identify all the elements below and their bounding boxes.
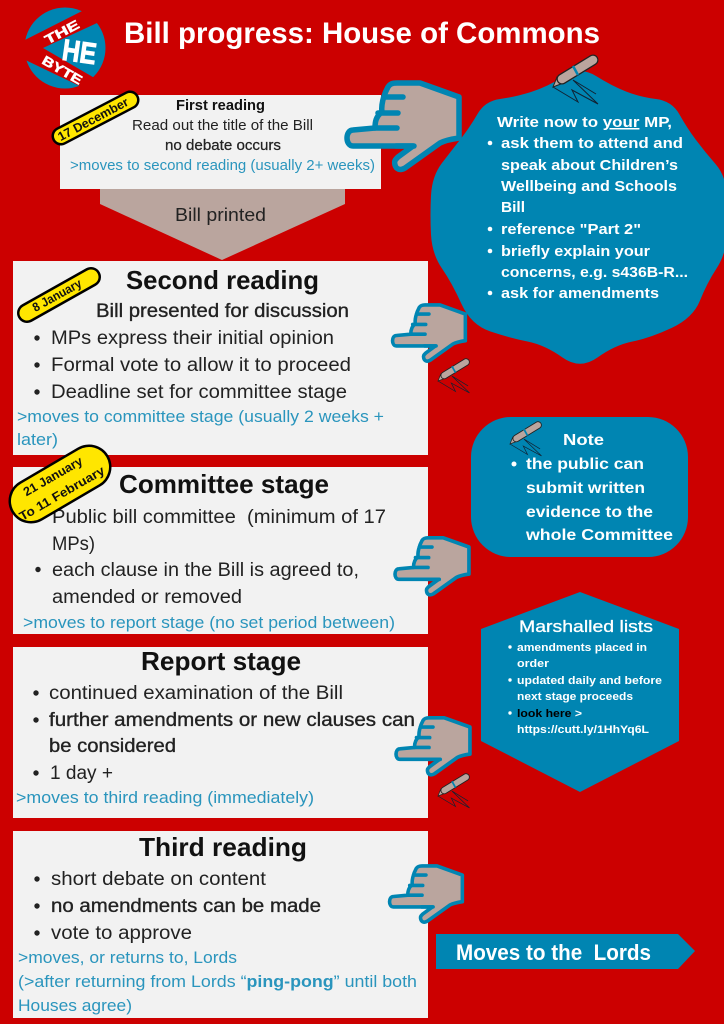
panel: second reading: Deadline set for committee stage bbox=[51, 382, 347, 403]
callout: write to your MP: reference "Part 2" bbox=[501, 221, 641, 238]
icon: pen beside second reading bbox=[438, 362, 470, 393]
panel: committee stage: Committee stage bbox=[119, 469, 329, 499]
logo: The HE Byte: BYTE bbox=[39, 53, 85, 88]
callout: note: Note bbox=[563, 432, 604, 449]
panel: third reading: Houses agree) bbox=[18, 996, 132, 1015]
icon: hand pointing at second reading bbox=[393, 305, 465, 361]
panel: committee stage: amended or removed bbox=[52, 587, 242, 608]
callout: marshalled lists: next stage proceeds bbox=[517, 691, 633, 703]
callout: marshalled lists: order bbox=[517, 658, 550, 670]
date badge: 17 December: 17 December bbox=[55, 95, 131, 144]
callout: write to your MP: ask them to attend and bbox=[501, 135, 683, 152]
icon: hand pointing at first reading bbox=[347, 83, 459, 169]
panel: report stage: be considered bbox=[49, 736, 176, 757]
panel: first reading: First reading bbox=[176, 98, 265, 114]
panel: second reading: Second reading bbox=[126, 265, 319, 295]
date badge: 21 January to 11 February: 21 January bbox=[21, 454, 85, 499]
icon: pen on MP callout bbox=[553, 60, 598, 104]
callout: marshalled lists: Marshalled lists bbox=[519, 617, 653, 636]
panel: first reading: Read out the title of the Bill bbox=[132, 118, 313, 134]
panel: report stage: Report stage bbox=[141, 646, 301, 676]
icon: hand pointing at third reading bbox=[390, 866, 462, 922]
icon: hand pointing at committee stage bbox=[395, 538, 469, 595]
panel: third reading: Third reading bbox=[139, 832, 307, 862]
panel: second reading: later) bbox=[17, 430, 58, 449]
panel: committee stage: Public bill committee (minimum of 17 bbox=[52, 507, 386, 528]
panel: second reading: MPs express their initial opinion bbox=[51, 328, 334, 349]
arrow: Bill printed: Bill printed bbox=[175, 205, 266, 225]
panel: committee stage: each clause in the Bill is agreed to, bbox=[52, 560, 359, 581]
callout: write to your MP: speak about Children’s bbox=[501, 157, 678, 174]
panel: committee stage bbox=[13, 467, 428, 634]
arrow: Bill printed bbox=[100, 189, 345, 260]
panel: report stage: further amendments or new clauses can bbox=[49, 710, 415, 731]
panel: first reading bbox=[60, 95, 381, 189]
icon: pen on note bbox=[510, 425, 542, 456]
callout: write to your MP: ask for amendments bbox=[501, 285, 659, 302]
panel: second reading bbox=[13, 261, 428, 455]
callout: write to your MP: Bill bbox=[501, 199, 525, 216]
panel: second reading: >moves to committee stage (usually 2 weeks + bbox=[17, 407, 384, 426]
panel: report stage: >moves to third reading (immediately) bbox=[16, 788, 314, 807]
callout: write to your MP: Write now to your MP, bbox=[497, 114, 672, 131]
panel: third reading: (>after returning from Lords “ ping-pong” until both bbox=[18, 972, 417, 991]
date badge: 8 January: 8 January bbox=[30, 276, 84, 315]
panel: first reading: >moves to second reading (usually 2+ weeks) bbox=[70, 157, 375, 174]
callout: marshalled lists: look here > bbox=[517, 708, 582, 720]
callout: marshalled lists: updated daily and before bbox=[517, 675, 662, 687]
panel: third reading: short debate on content bbox=[51, 869, 267, 890]
icon: pen beside report stage bbox=[438, 777, 470, 808]
panel: committee stage: MPs) bbox=[52, 534, 95, 555]
arrow: moves to the Lords: Moves to the Lords bbox=[456, 940, 651, 965]
callout: note: evidence to the bbox=[526, 504, 653, 521]
callout: note: submit written bbox=[526, 480, 645, 497]
callout: note bbox=[471, 417, 688, 557]
panel: report stage: 1 day + bbox=[50, 763, 113, 784]
panel: third reading: no amendments can be made bbox=[51, 896, 321, 917]
date badge: 21 January to 11 February: To 11 February bbox=[17, 463, 107, 524]
callout: write to your MP: briefly explain your bbox=[501, 243, 650, 260]
panel: report stage bbox=[13, 646, 428, 818]
panel: report stage: continued examination of the Bill bbox=[49, 683, 343, 704]
callout: marshalled lists: amendments placed in bbox=[517, 642, 647, 654]
panel: second reading: Bill presented for discussion bbox=[96, 301, 349, 322]
panel: third reading bbox=[13, 831, 428, 1018]
panel: third reading: >moves, or returns to, Lords bbox=[18, 948, 237, 967]
arrow: moves to the Lords bbox=[436, 934, 695, 969]
panel: committee stage: >moves to report stage (no set period between) bbox=[23, 613, 395, 632]
callout: write to your MP: Wellbeing and Schools bbox=[501, 178, 677, 195]
title: Bill progress: House of Commons bbox=[124, 17, 600, 50]
logo: The HE Byte bbox=[15, 7, 110, 91]
callout: note: whole Committee bbox=[525, 527, 673, 544]
callout: marshalled lists bbox=[481, 592, 679, 792]
callout: marshalled lists: https://cutt.ly/1HhYq6L bbox=[517, 724, 649, 736]
logo: The HE Byte: THE bbox=[42, 16, 82, 47]
callout: write to your MP: concerns, e.g. s436B-R... bbox=[501, 264, 688, 281]
panel: second reading: Formal vote to allow it to proceed bbox=[51, 355, 351, 376]
panel: third reading: vote to approve bbox=[51, 923, 192, 944]
callout: note: the public can bbox=[526, 456, 644, 473]
logo: The HE Byte: HE bbox=[60, 34, 98, 71]
callout: write to your MP bbox=[430, 71, 724, 364]
panel: first reading: no debate occurs bbox=[165, 138, 281, 154]
icon: hand pointing at report stage bbox=[396, 718, 470, 775]
